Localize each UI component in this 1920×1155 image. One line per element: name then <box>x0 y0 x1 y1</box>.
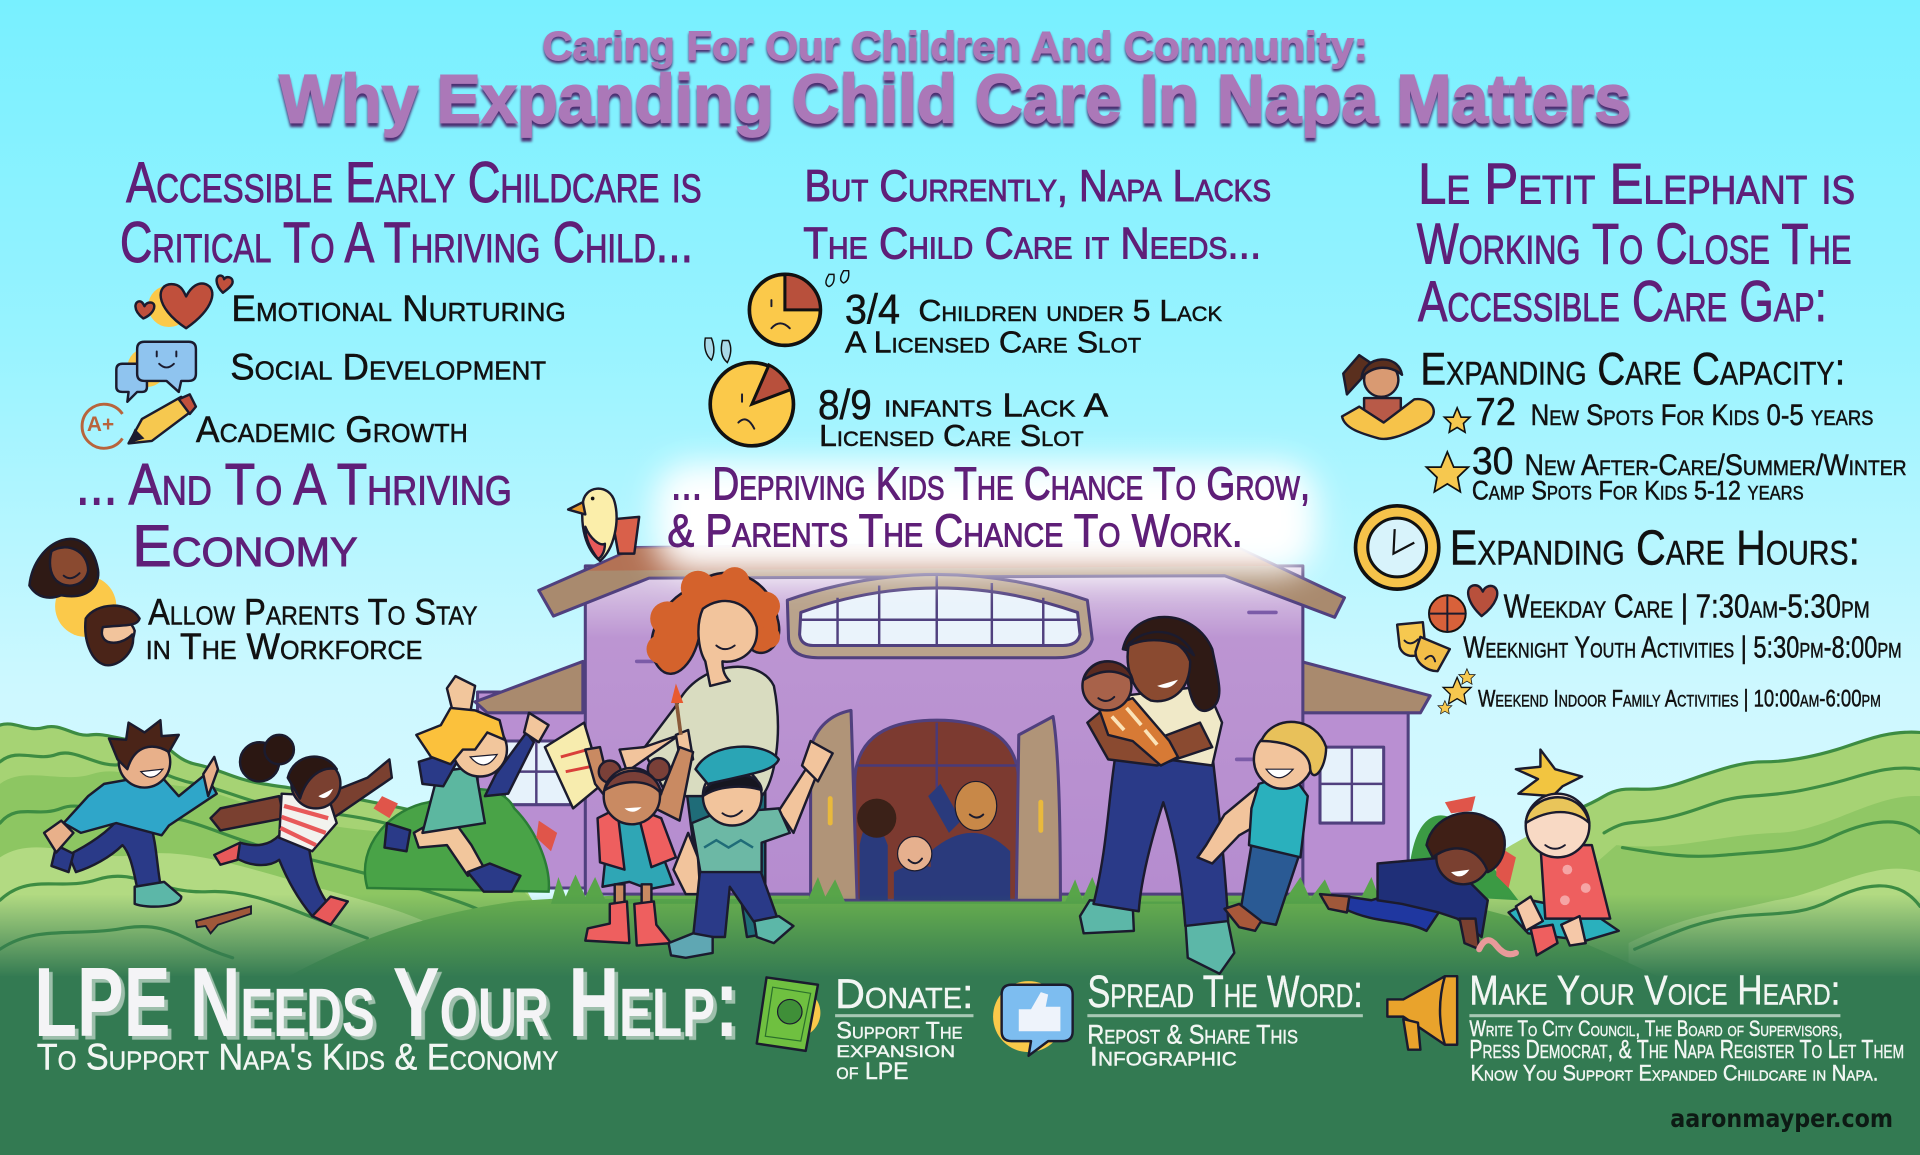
panel: center column - the shortage <box>568 162 1310 561</box>
icon: sad pie chart eight ninths <box>705 338 793 446</box>
icon: A+ and pencil <box>82 394 196 448</box>
panel: left column - child benefits <box>29 151 702 667</box>
icon: child held in hand <box>1342 355 1434 439</box>
make your voice heard action: Know You Support Expanded Childcare in Napa. <box>1471 1060 1878 1085</box>
main wall <box>585 566 1303 894</box>
text: support subheading: To Support Napa's Kids & Economy <box>37 1036 558 1077</box>
heading: accessible childcare: Accessible Early Childcare is <box>126 151 702 215</box>
kid running in blue jacket <box>44 720 218 907</box>
left door <box>811 710 857 900</box>
ground fade into footer <box>0 894 1920 977</box>
caption: depriving kids <box>667 458 1310 556</box>
text: academic growth: Academic Growth <box>196 409 468 450</box>
stat: three quarters of children: A Licensed Care Slot <box>845 326 1141 360</box>
text: emotional nurturing: Emotional Nurturing <box>231 288 566 329</box>
right wing <box>1298 661 1430 894</box>
stat: 30 new spots <box>1472 440 1907 506</box>
caption: depriving kids: & Parents The Chance To Work. <box>667 504 1243 556</box>
stat: eight ninths of infants: infants Lack A <box>884 387 1108 424</box>
heading: le petit elephant: Le Petit Elephant is <box>1418 152 1855 216</box>
girl in red vest holding drawing <box>545 723 693 946</box>
text: social development: Social Development <box>230 347 546 388</box>
spread the word action: Infographic <box>1090 1042 1237 1072</box>
text: allow parents to stay: in The Workforce <box>146 626 422 667</box>
right door <box>1016 717 1060 900</box>
donate action: Support The <box>836 1018 962 1045</box>
footer band <box>0 976 1920 1155</box>
grass tufts along the wall <box>551 875 1381 904</box>
spread the word action <box>1087 966 1363 1072</box>
stat: 30 new spots: 30 <box>1472 440 1513 483</box>
kid running in striped shirt <box>211 735 392 925</box>
left wing <box>475 661 588 888</box>
stat: eight ninths of infants: 8/9 <box>818 381 872 428</box>
heading: napa lacks child care: But Currently, Napa Lacks <box>804 162 1271 211</box>
main title <box>279 23 1631 137</box>
heading: napa lacks child care <box>803 162 1271 268</box>
panel: call to action footer <box>34 947 1904 1133</box>
heading: thriving economy: Economy <box>132 514 358 579</box>
heading: thriving economy <box>76 453 512 579</box>
icon: star <box>1444 408 1470 432</box>
icon: parents faces <box>29 539 140 665</box>
spread the word action: Spread The Word: <box>1087 966 1363 1017</box>
stat: 72 new spots: 72 <box>1476 391 1516 434</box>
icon: heart <box>135 276 233 328</box>
boy in teal cap <box>669 741 833 958</box>
text: allow parents to stay <box>146 592 478 667</box>
heading: thriving economy: ... And To A Thriving <box>76 453 512 518</box>
icon: cluster of stars <box>1438 669 1475 714</box>
hills: left <box>0 724 576 980</box>
stat: three quarters of children <box>845 285 1222 360</box>
title line one: Caring For Our Children And Community: <box>542 23 1368 69</box>
donate action: of LPE <box>836 1058 909 1085</box>
baby <box>1082 661 1178 766</box>
heading: le petit elephant <box>1417 152 1855 334</box>
brick marks <box>637 612 1276 759</box>
blonde boy <box>1198 722 1326 931</box>
icon: bird on roof <box>568 489 639 561</box>
icon: A+ and pencil: A+ <box>87 413 114 436</box>
donate action: Donate: <box>835 970 973 1017</box>
spread the word action: Repost & Share This <box>1087 1020 1298 1050</box>
ground <box>282 889 1665 980</box>
girl sitting with ponytail <box>1509 750 1619 955</box>
heading: napa lacks child care: The Child Care it Needs... <box>803 219 1261 268</box>
make your voice heard action <box>1469 966 1904 1085</box>
credit: aaronmayper.com <box>1670 1104 1893 1133</box>
title line two: Why Expanding Child Care In Napa Matters <box>279 60 1631 137</box>
red-haired woman with paintbrush <box>620 567 784 937</box>
icon: large star <box>1426 452 1468 492</box>
icon: basketball and heart <box>1429 585 1497 632</box>
woman with dark hair holding baby <box>1080 617 1234 974</box>
crawling kid <box>1320 813 1505 949</box>
stat: 72 new spots <box>1476 391 1873 434</box>
heading: LPE needs your help: LPE Needs Your Help: <box>34 947 738 1057</box>
panel: right column - le petit elephant <box>1342 152 1907 714</box>
make your voice heard action: Make Your Voice Heard: <box>1469 966 1840 1013</box>
glow behind caption <box>655 463 1316 573</box>
heading: expanding care capacity: Expanding Care Capacity: <box>1420 344 1845 395</box>
stat: three quarters of children: Children under 5 Lack <box>918 294 1222 328</box>
stat: 72 new spots: New Spots For Kids 0-5 years <box>1531 399 1873 432</box>
worm <box>1479 940 1516 954</box>
stat: eight ninths of infants: Licensed Care Slot <box>819 419 1084 453</box>
building <box>475 541 1430 900</box>
heading: accessible childcare <box>120 151 702 275</box>
icon: clock <box>1356 506 1439 589</box>
doorway <box>855 720 1019 900</box>
clerestory window <box>787 574 1092 658</box>
stat: eight ninths of infants <box>818 381 1108 453</box>
stat: three quarters of children: 3/4 <box>845 285 900 332</box>
donate action <box>835 970 973 1085</box>
blonde kid leaping <box>384 676 549 892</box>
icon: speech bubbles <box>116 342 196 402</box>
icon: money <box>757 977 820 1051</box>
caption: depriving kids: ... Depriving Kids The Chance To Grow, <box>671 458 1310 510</box>
text: allow parents to stay: Allow Parents To Stay <box>148 592 478 633</box>
stick on the ground <box>196 906 251 933</box>
roof <box>539 541 1344 617</box>
stat: 30 new spots: Camp Spots For Kids 5-12 years <box>1472 476 1804 506</box>
hills: right <box>1384 732 1920 980</box>
donate action: expansion <box>836 1036 955 1063</box>
icon: megaphone <box>1387 976 1457 1050</box>
icon: sad pie chart three quarters <box>749 271 849 345</box>
icon: thumbs up bubble <box>993 981 1073 1056</box>
icon: theatre masks <box>1397 622 1450 671</box>
heading: accessible childcare: Critical To A Thriving Child... <box>120 211 693 275</box>
bushes and flowers <box>365 789 1518 900</box>
